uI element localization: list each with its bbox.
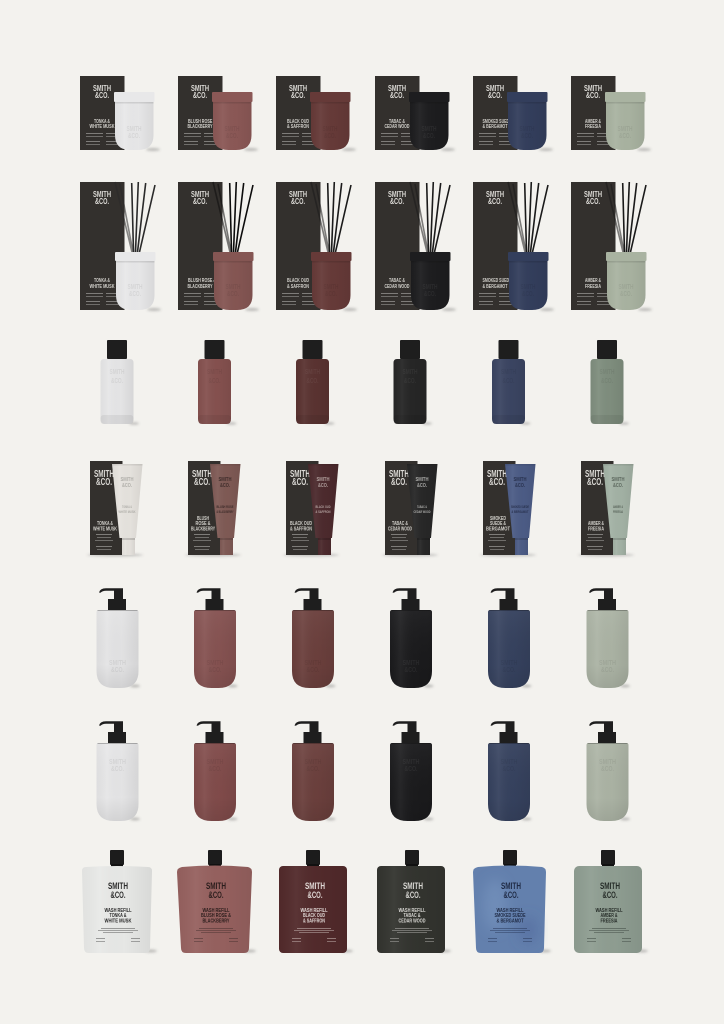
product: Blush Rose and Blackberry tube: ROSE & bbox=[196, 521, 211, 527]
product: Black Oud and Saffron candle: SMITH bbox=[322, 126, 338, 133]
product: Tonka and White Musk bottle: &CO. bbox=[111, 378, 123, 385]
product: Black Oud and Saffron refill pouch: WASH REFILL bbox=[300, 908, 328, 914]
product: Tabac and Cedar Wood diffuser: &CO. bbox=[424, 291, 436, 298]
product: Amber and Freesia candle: &CO. bbox=[586, 90, 600, 100]
product: Amber and Freesia tube: SMITH bbox=[612, 477, 625, 483]
row: small bottles bbox=[100, 340, 629, 425]
product: Tabac and Cedar Wood bottle bbox=[394, 340, 432, 425]
product: Black Oud and Saffron tube: & SAFFRON bbox=[316, 510, 331, 514]
product: Tonka and White Musk candle: &CO. bbox=[128, 133, 140, 140]
product: Amber and Freesia diffuser: SMITH bbox=[584, 189, 602, 199]
product: Tabac and Cedar Wood pump, high logo: &CO. bbox=[404, 766, 418, 773]
product: Blush Rose and Blackberry tube: &CO. bbox=[220, 483, 230, 489]
product: Black Oud and Saffron diffuser: SMITH bbox=[324, 284, 338, 291]
product: Amber and Freesia tube: AMBER & bbox=[613, 505, 623, 509]
product: Blush Rose and Blackberry candle: SMITH bbox=[224, 126, 240, 133]
product: Tonka and White Musk candle: &CO. bbox=[95, 90, 109, 100]
product: Smoked Suede and Bergamot pump, high logo bbox=[488, 721, 532, 821]
product: Black Oud and Saffron candle bbox=[276, 76, 356, 151]
product: Tonka and White Musk refill pouch: &CO. bbox=[110, 890, 126, 901]
product: Tonka and White Musk bottle: SMITH bbox=[110, 369, 124, 376]
product: Tabac and Cedar Wood diffuser: SMITH bbox=[388, 189, 406, 199]
product: Tonka and White Musk diffuser: SMITH bbox=[128, 284, 142, 291]
product: Smoked Suede and Bergamot diffuser: SMITH bbox=[520, 284, 536, 291]
product: Black Oud and Saffron diffuser: SMITH bbox=[289, 189, 307, 199]
product: Amber and Freesia diffuser: &CO. bbox=[586, 196, 600, 206]
product: Amber and Freesia candle: SMITH bbox=[618, 126, 632, 133]
product: Smoked Suede and Bergamot diffuser: SMITH bbox=[486, 189, 504, 199]
product: Black Oud and Saffron diffuser: &CO. bbox=[325, 291, 337, 298]
product: Blush Rose and Blackberry tube: BLUSH bbox=[197, 516, 209, 522]
product: Tonka and White Musk tube: WHITE MUSK bbox=[93, 526, 117, 532]
product: Tabac and Cedar Wood pump, high logo: SMITH bbox=[402, 759, 420, 766]
product: Blush Rose and Blackberry tube: BLUSH ROSE bbox=[216, 505, 234, 509]
product: Blush Rose and Blackberry diffuser bbox=[178, 182, 259, 311]
product: Smoked Suede and Bergamot candle: &CO. bbox=[488, 90, 502, 100]
product: Blush Rose and Blackberry pump, high logo bbox=[194, 721, 238, 821]
product: Smoked Suede and Bergamot tube: SMOKED SUEDE bbox=[511, 505, 529, 509]
product: Blush Rose and Blackberry bottle bbox=[198, 340, 236, 425]
product: Amber and Freesia bottle: &CO. bbox=[601, 378, 613, 385]
product: Tonka and White Musk diffuser: TONKA & bbox=[94, 278, 110, 284]
product: Black Oud and Saffron bottle: SMITH bbox=[305, 369, 320, 376]
product: Smoked Suede and Bergamot candle: & BERGAMOT bbox=[482, 124, 508, 130]
product: Black Oud and Saffron candle: & SAFFRON bbox=[287, 124, 309, 130]
product: Amber and Freesia diffuser: SMITH bbox=[618, 284, 634, 291]
product: Amber and Freesia candle: AMBER & bbox=[585, 119, 601, 125]
product: Amber and Freesia bottle bbox=[590, 340, 629, 425]
product: Smoked Suede and Bergamot tube: &CO. bbox=[515, 483, 525, 489]
product: Black Oud and Saffron diffuser: BLACK OUD bbox=[287, 278, 309, 284]
product: Black Oud and Saffron tube: BLACK OUD bbox=[290, 521, 312, 527]
product: Tabac and Cedar Wood tube: CEDAR WOOD bbox=[414, 510, 431, 514]
product: Tonka and White Musk tube: TONKA & bbox=[97, 521, 113, 527]
product: Blush Rose and Blackberry refill pouch: BLACKBERRY bbox=[202, 918, 230, 924]
product: Amber and Freesia refill pouch bbox=[574, 850, 648, 953]
product: Tabac and Cedar Wood diffuser: &CO. bbox=[390, 196, 404, 206]
product: Tabac and Cedar Wood tube: SMITH bbox=[389, 469, 409, 480]
product: Black Oud and Saffron refill pouch: SMITH bbox=[305, 881, 325, 892]
product: Black Oud and Saffron bottle: &CO. bbox=[306, 378, 319, 385]
product: Tonka and White Musk candle: WHITE MUSK bbox=[90, 124, 115, 130]
product: Tonka and White Musk diffuser: WHITE MUSK bbox=[90, 284, 115, 290]
product: Smoked Suede and Bergamot candle: SMITH bbox=[520, 126, 534, 133]
product: Amber and Freesia pump, high logo bbox=[586, 721, 630, 821]
product: Black Oud and Saffron tube: & SAFFRON bbox=[290, 526, 312, 532]
product: Tabac and Cedar Wood candle: TABAC & bbox=[389, 119, 405, 125]
product: Blush Rose and Blackberry diffuser: SMITH bbox=[191, 189, 209, 199]
product: Tabac and Cedar Wood diffuser: CEDAR WOOD bbox=[384, 284, 410, 290]
product: Tonka and White Musk refill pouch: TONKA & bbox=[110, 913, 127, 919]
product: Amber and Freesia pump, high logo: SMITH bbox=[599, 759, 616, 766]
product: Black Oud and Saffron pump bbox=[292, 588, 336, 688]
product: Smoked Suede and Bergamot refill pouch: SMOKED SUEDE bbox=[494, 913, 526, 919]
product: Tonka and White Musk tube: SMITH bbox=[94, 469, 114, 480]
product: Tonka and White Musk diffuser: &CO. bbox=[95, 196, 109, 206]
product: Amber and Freesia candle: &CO. bbox=[619, 133, 631, 140]
product: Tabac and Cedar Wood tube: &CO. bbox=[391, 477, 407, 488]
product: Blush Rose and Blackberry diffuser: &CO. bbox=[227, 291, 239, 298]
product: Amber and Freesia pump: &CO. bbox=[601, 667, 614, 674]
product: Tonka and White Musk pump, high logo: SMITH bbox=[109, 759, 126, 766]
product: Blush Rose and Blackberry candle: &CO. bbox=[226, 133, 238, 140]
product: Tabac and Cedar Wood tube bbox=[382, 461, 438, 556]
product: Tabac and Cedar Wood candle: &CO. bbox=[390, 90, 404, 100]
product: Black Oud and Saffron refill pouch: &CO. bbox=[308, 890, 322, 901]
product: Smoked Suede and Bergamot refill pouch bbox=[473, 850, 551, 953]
product: Smoked Suede and Bergamot tube: & BERGAMOT bbox=[512, 510, 529, 514]
product: Tonka and White Musk candle: SMITH bbox=[126, 126, 142, 133]
product: Tonka and White Musk refill pouch: SMITH bbox=[108, 881, 128, 892]
product: Amber and Freesia diffuser: AMBER & bbox=[585, 278, 601, 284]
product: Black Oud and Saffron refill pouch bbox=[279, 850, 353, 953]
product: Tabac and Cedar Wood pump, high logo bbox=[390, 721, 434, 821]
product: Black Oud and Saffron pump, high logo: &CO. bbox=[306, 766, 320, 773]
product: Blush Rose and Blackberry candle: SMITH bbox=[191, 83, 209, 93]
product: Smoked Suede and Bergamot candle: SMOKED SUEDE bbox=[482, 119, 512, 125]
product: Blush Rose and Blackberry diffuser: SMITH bbox=[226, 284, 240, 291]
product: Smoked Suede and Bergamot candle: SMITH bbox=[486, 83, 504, 93]
product: Blush Rose and Blackberry tube: &CO. bbox=[194, 477, 210, 488]
product: Blush Rose and Blackberry pump bbox=[194, 588, 238, 688]
product: Amber and Freesia tube: &CO. bbox=[613, 483, 623, 489]
product: Tonka and White Musk pump: &CO. bbox=[111, 667, 124, 674]
product: Tabac and Cedar Wood diffuser bbox=[375, 182, 456, 311]
product: Black Oud and Saffron diffuser: & SAFFRON bbox=[287, 284, 309, 290]
product: Tonka and White Musk bottle bbox=[100, 340, 139, 425]
product: Black Oud and Saffron candle: SMITH bbox=[289, 83, 307, 93]
product: Tabac and Cedar Wood refill pouch: CEDAR WOOD bbox=[398, 918, 426, 924]
product: Tabac and Cedar Wood refill pouch: SMITH bbox=[403, 881, 423, 892]
product: Amber and Freesia diffuser bbox=[571, 182, 652, 311]
product: Tabac and Cedar Wood tube: CEDAR WOOD bbox=[388, 526, 412, 532]
product: Smoked Suede and Bergamot pump, high logo: SMITH bbox=[500, 759, 518, 766]
product: Blush Rose and Blackberry diffuser: BLUSH ROSE & bbox=[188, 278, 216, 284]
product: Smoked Suede and Bergamot diffuser: & BERGAMOT bbox=[482, 284, 508, 290]
product: Smoked Suede and Bergamot pump: SMITH bbox=[500, 660, 518, 667]
product: Tabac and Cedar Wood pump: &CO. bbox=[404, 667, 418, 674]
product: Tabac and Cedar Wood pump: SMITH bbox=[402, 660, 420, 667]
product: Blush Rose and Blackberry candle: BLACKBERRY bbox=[188, 124, 213, 130]
product: Black Oud and Saffron candle: &CO. bbox=[324, 133, 336, 140]
product: Black Oud and Saffron pump, high logo: SMITH bbox=[304, 759, 322, 766]
product: Blush Rose and Blackberry candle: &CO. bbox=[193, 90, 207, 100]
product: Smoked Suede and Bergamot diffuser bbox=[473, 182, 554, 311]
product: Smoked Suede and Bergamot tube: SUEDE & bbox=[490, 521, 506, 527]
product: Smoked Suede and Bergamot bottle: SMITH bbox=[501, 369, 516, 376]
product: Tabac and Cedar Wood diffuser: TABAC & bbox=[389, 278, 405, 284]
product: Amber and Freesia pump bbox=[586, 588, 630, 688]
product: Blush Rose and Blackberry diffuser: BLACKBERRY bbox=[188, 284, 213, 290]
product: Blush Rose and Blackberry refill pouch: BLUSH ROSE & bbox=[201, 913, 231, 919]
product: Amber and Freesia pump, high logo: &CO. bbox=[601, 766, 614, 773]
product: Tabac and Cedar Wood tube: TABAC & bbox=[392, 521, 408, 527]
product: Smoked Suede and Bergamot refill pouch: WASH REFILL bbox=[496, 908, 524, 914]
product: Black Oud and Saffron candle: BLACK OUD bbox=[287, 119, 309, 125]
product: Smoked Suede and Bergamot candle bbox=[473, 76, 553, 151]
product: Blush Rose and Blackberry tube bbox=[185, 461, 241, 556]
product: Amber and Freesia tube: AMBER & bbox=[588, 521, 604, 527]
product: Tonka and White Musk candle bbox=[80, 76, 160, 151]
row: candles with cartons bbox=[80, 76, 651, 151]
product: Blush Rose and Blackberry tube: SMITH bbox=[192, 469, 212, 480]
product: Tonka and White Musk refill pouch bbox=[82, 850, 157, 953]
product: Tonka and White Musk pump bbox=[96, 588, 140, 688]
product: Tabac and Cedar Wood bottle: &CO. bbox=[404, 378, 416, 385]
product: Amber and Freesia refill pouch: WASH REFILL bbox=[596, 908, 622, 914]
product: Tonka and White Musk tube: TONKA & bbox=[122, 505, 132, 509]
product: Tabac and Cedar Wood refill pouch: WASH REFILL bbox=[398, 908, 426, 914]
product: Tabac and Cedar Wood candle: SMITH bbox=[388, 83, 406, 93]
product: Smoked Suede and Bergamot tube: &CO. bbox=[489, 477, 505, 488]
product: Smoked Suede and Bergamot diffuser: &CO. bbox=[488, 196, 502, 206]
product: Tonka and White Musk refill pouch: WHITE MUSK bbox=[104, 918, 132, 924]
product: Blush Rose and Blackberry tube: BLACKBERRY bbox=[191, 526, 215, 532]
product: Black Oud and Saffron tube: &CO. bbox=[292, 477, 308, 488]
product: Black Oud and Saffron pump: &CO. bbox=[306, 667, 320, 674]
product: Black Oud and Saffron tube bbox=[283, 461, 339, 556]
row: hand cream tubes with cartons bbox=[87, 461, 634, 556]
product: Blush Rose and Blackberry pump, high logo: SMITH bbox=[206, 759, 224, 766]
product: Tabac and Cedar Wood tube: TABAC & bbox=[417, 505, 427, 509]
product: Tabac and Cedar Wood candle: &CO. bbox=[423, 133, 435, 140]
product: Tonka and White Musk candle: SMITH bbox=[93, 83, 111, 93]
product: Tabac and Cedar Wood candle bbox=[375, 76, 455, 151]
product: Smoked Suede and Bergamot refill pouch: & BERGAMOT bbox=[496, 918, 524, 924]
product: Tabac and Cedar Wood bottle: SMITH bbox=[402, 369, 418, 376]
product: Amber and Freesia tube bbox=[578, 461, 634, 556]
product: Blush Rose and Blackberry candle bbox=[178, 76, 258, 151]
product: Tabac and Cedar Wood refill pouch: TABAC & bbox=[404, 913, 421, 919]
product: Smoked Suede and Bergamot tube bbox=[480, 461, 536, 556]
product: Amber and Freesia refill pouch: FREESIA bbox=[600, 918, 618, 924]
product: Amber and Freesia pump: SMITH bbox=[599, 660, 616, 667]
product: Amber and Freesia tube: SMITH bbox=[585, 469, 605, 480]
product: Smoked Suede and Bergamot diffuser: SMOKED SUEDE bbox=[482, 278, 512, 284]
product: Tabac and Cedar Wood candle: SMITH bbox=[422, 126, 436, 133]
product: Amber and Freesia candle: FREESIA bbox=[585, 124, 601, 130]
product: Smoked Suede and Bergamot candle: &CO. bbox=[521, 133, 533, 140]
product: Black Oud and Saffron diffuser: &CO. bbox=[291, 196, 305, 206]
product: Black Oud and Saffron bottle bbox=[296, 340, 334, 425]
product: Blush Rose and Blackberry refill pouch: SMITH bbox=[206, 881, 226, 892]
product: Black Oud and Saffron pump, high logo bbox=[292, 721, 336, 821]
product: Tonka and White Musk tube: &CO. bbox=[122, 483, 132, 489]
product: Black Oud and Saffron tube: BLACK OUD bbox=[316, 505, 331, 509]
product: Tonka and White Musk pump, high logo bbox=[96, 721, 140, 821]
product: Tonka and White Musk tube bbox=[87, 461, 143, 556]
product: Amber and Freesia diffuser: &CO. bbox=[620, 291, 632, 298]
product: Smoked Suede and Bergamot refill pouch: &CO. bbox=[504, 890, 518, 901]
product: Smoked Suede and Bergamot tube: SMOKED bbox=[490, 516, 506, 522]
product: Smoked Suede and Bergamot tube: BERGAMOT bbox=[486, 526, 511, 532]
product: Amber and Freesia refill pouch: &CO. bbox=[602, 890, 618, 901]
product: Blush Rose and Blackberry tube: & BLACKBERRY bbox=[216, 510, 234, 514]
product: Blush Rose and Blackberry refill pouch bbox=[177, 850, 256, 953]
product: Tabac and Cedar Wood refill pouch bbox=[377, 850, 451, 953]
product: Amber and Freesia refill pouch: AMBER & bbox=[600, 913, 618, 919]
row: reed diffusers with cartons bbox=[80, 182, 652, 311]
product: Black Oud and Saffron tube: SMITH bbox=[290, 469, 310, 480]
product: Tonka and White Musk pump, high logo: &CO. bbox=[111, 766, 124, 773]
product: Amber and Freesia candle: SMITH bbox=[584, 83, 602, 93]
product: Amber and Freesia diffuser: FREESIA bbox=[585, 284, 601, 290]
product: Amber and Freesia refill pouch: SMITH bbox=[600, 881, 620, 892]
product: Tabac and Cedar Wood diffuser: SMITH bbox=[422, 284, 438, 291]
row: pump bottles with low logo bbox=[96, 588, 630, 688]
product: Black Oud and Saffron tube: SMITH bbox=[316, 477, 330, 483]
product: Smoked Suede and Bergamot pump: &CO. bbox=[502, 667, 516, 674]
product: Blush Rose and Blackberry bottle: SMITH bbox=[207, 369, 222, 376]
product: Tabac and Cedar Wood tube: SMITH bbox=[416, 477, 429, 483]
product: Tabac and Cedar Wood pump bbox=[390, 588, 434, 688]
product: Blush Rose and Blackberry bottle: &CO. bbox=[208, 378, 221, 385]
product: Amber and Freesia tube: &CO. bbox=[587, 477, 603, 488]
product: Black Oud and Saffron diffuser bbox=[276, 182, 357, 311]
product: Tonka and White Musk diffuser: &CO. bbox=[129, 291, 141, 298]
product: Tabac and Cedar Wood tube: &CO. bbox=[417, 483, 427, 489]
product: Blush Rose and Blackberry candle: BLUSH ROSE & bbox=[188, 119, 216, 125]
product: Blush Rose and Blackberry pump, high logo: &CO. bbox=[208, 766, 222, 773]
product: Amber and Freesia bottle: SMITH bbox=[600, 369, 614, 376]
product: Smoked Suede and Bergamot refill pouch: SMITH bbox=[501, 881, 521, 892]
product: Amber and Freesia candle bbox=[571, 76, 651, 151]
product: Black Oud and Saffron pump: SMITH bbox=[304, 660, 322, 667]
product: Blush Rose and Blackberry pump: &CO. bbox=[208, 667, 222, 674]
product: Blush Rose and Blackberry pump: SMITH bbox=[206, 660, 224, 667]
product: Blush Rose and Blackberry refill pouch: WASH REFILL bbox=[202, 908, 230, 914]
product: Blush Rose and Blackberry diffuser: &CO. bbox=[193, 196, 207, 206]
product: Smoked Suede and Bergamot tube: SMITH bbox=[514, 477, 527, 483]
row: pump bottles with high logo bbox=[96, 721, 630, 821]
product: Black Oud and Saffron refill pouch: & SAFFRON bbox=[303, 918, 325, 924]
product: Tonka and White Musk tube: &CO. bbox=[96, 477, 112, 488]
product: Tabac and Cedar Wood refill pouch: &CO. bbox=[406, 890, 420, 901]
product: Smoked Suede and Bergamot diffuser: &CO. bbox=[522, 291, 534, 298]
product: Black Oud and Saffron candle: &CO. bbox=[291, 90, 305, 100]
product: Tonka and White Musk tube: SMITH bbox=[120, 477, 134, 483]
product: Smoked Suede and Bergamot pump bbox=[488, 588, 532, 688]
product: Tonka and White Musk refill pouch: WASH REFILL bbox=[104, 908, 132, 914]
product: Amber and Freesia tube: FREESIA bbox=[588, 526, 604, 532]
product: Black Oud and Saffron tube: &CO. bbox=[318, 483, 328, 489]
product: Tonka and White Musk pump: SMITH bbox=[109, 660, 126, 667]
product: Smoked Suede and Bergamot bottle bbox=[492, 340, 530, 425]
product: Blush Rose and Blackberry refill pouch: &CO. bbox=[208, 890, 224, 901]
product: Tonka and White Musk diffuser bbox=[80, 182, 161, 311]
product: Tonka and White Musk diffuser: SMITH bbox=[93, 189, 111, 199]
product: Tonka and White Musk candle: TONKA & bbox=[94, 119, 110, 125]
row: wash refill pouches bbox=[82, 850, 648, 953]
product: Amber and Freesia tube: FREESIA bbox=[613, 510, 623, 514]
product: Smoked Suede and Bergamot bottle: &CO. bbox=[502, 378, 515, 385]
product: Tonka and White Musk tube: WHITE MUSK bbox=[118, 510, 136, 514]
product: Black Oud and Saffron refill pouch: BLACK OUD bbox=[303, 913, 325, 919]
product: Smoked Suede and Bergamot tube: SMITH bbox=[487, 469, 507, 480]
product: Blush Rose and Blackberry tube: SMITH bbox=[218, 477, 232, 483]
product: Tabac and Cedar Wood candle: CEDAR WOOD bbox=[384, 124, 410, 130]
product: Smoked Suede and Bergamot pump, high logo: &CO. bbox=[502, 766, 516, 773]
